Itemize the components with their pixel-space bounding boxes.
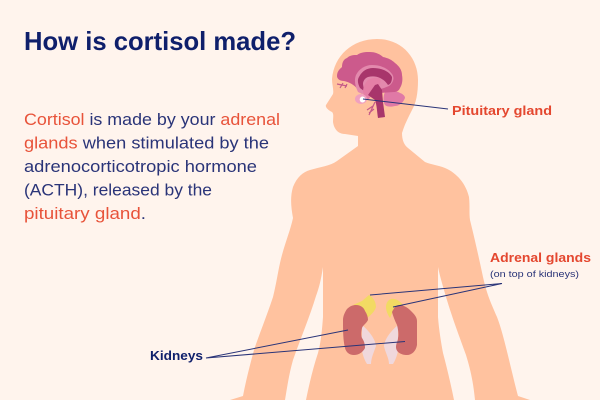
brainstem xyxy=(368,84,385,118)
brain light band xyxy=(355,65,393,94)
brain dark band xyxy=(358,68,392,91)
intro text block: adrenocorticotropic hormone xyxy=(24,157,257,176)
right adrenal gland xyxy=(386,299,403,318)
left adrenal gland xyxy=(353,295,376,318)
body silhouette xyxy=(230,39,530,400)
intro text block: Cortisol is made by your adrenal xyxy=(24,110,280,129)
adrenal leader lines xyxy=(370,284,502,307)
nerve roots xyxy=(337,83,375,115)
intro text block: glands when stimulated by the xyxy=(24,134,269,152)
label: adrenal glands: Adrenal glands xyxy=(490,250,591,265)
intro text block xyxy=(24,110,280,223)
thalamus xyxy=(363,78,380,100)
brain xyxy=(337,52,405,118)
intro text block: (ACTH), released by the xyxy=(24,180,212,200)
label: on top of kidneys: (on top of kidneys) xyxy=(490,269,579,279)
kidney leader lines xyxy=(206,330,405,358)
left kidney xyxy=(343,305,368,355)
kidneys and adrenal glands xyxy=(343,295,417,364)
label: pituitary gland: Pituitary gland xyxy=(452,103,552,118)
label: kidneys: Kidneys xyxy=(150,348,203,363)
pituitary gland marker xyxy=(355,94,367,104)
right kidney xyxy=(392,305,417,355)
cerebellum xyxy=(384,91,405,107)
title: How is cortisol made? xyxy=(24,26,296,56)
ureters xyxy=(361,325,399,364)
brain cerebrum xyxy=(337,52,402,94)
pituitary leader line xyxy=(363,99,448,109)
intro text block: pituitary gland . xyxy=(24,204,146,223)
